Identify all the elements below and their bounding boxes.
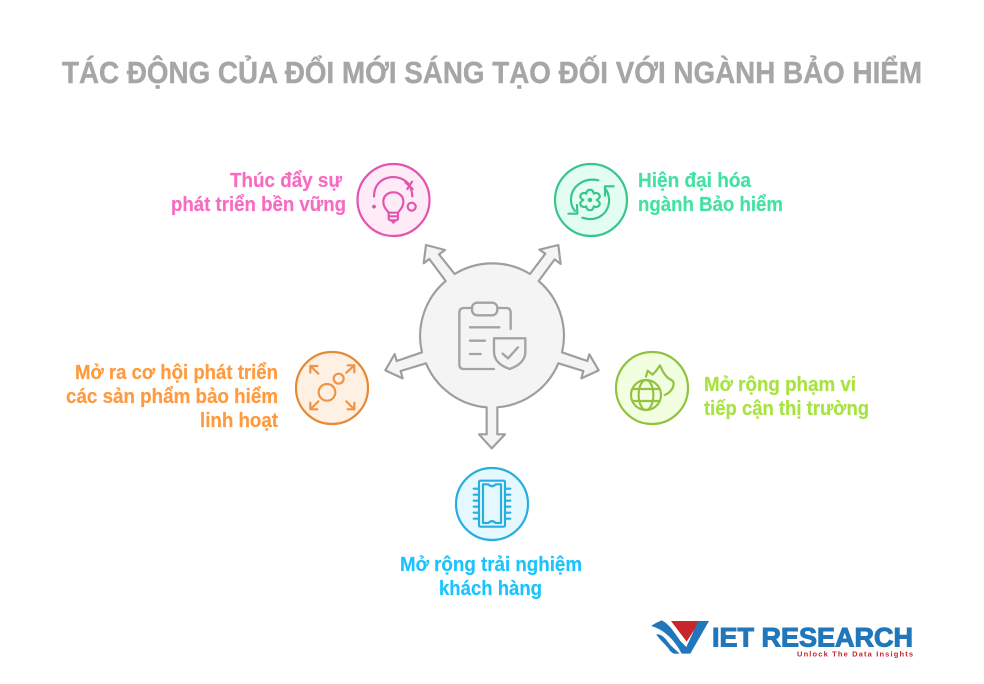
label xyxy=(704,374,869,420)
item: modernization (green) xyxy=(555,164,783,236)
label xyxy=(400,554,582,600)
label: Hiện đại hóa xyxy=(638,170,752,192)
node circle xyxy=(555,164,627,236)
label xyxy=(66,362,278,432)
label: Mở rộng trải nghiệm xyxy=(400,554,582,576)
label: Thúc đẩy sự xyxy=(230,170,342,192)
node circle xyxy=(616,352,688,424)
item: customer experience (blue) xyxy=(400,468,582,600)
title: TÁC ĐỘNG CỦA ĐỔI MỚI SÁNG TẠO ĐỐI VỚI NGÀNH BẢO HIỂM xyxy=(62,54,922,90)
node circle xyxy=(358,164,430,236)
label: linh hoạt xyxy=(200,410,278,432)
item: flexible products (orange) xyxy=(66,352,368,432)
node circle xyxy=(296,352,368,424)
icon: microchip xyxy=(474,481,510,527)
logo wordmark: IET RESEARCH xyxy=(712,622,913,652)
item: sustainable development (pink) xyxy=(171,164,430,236)
label: khách hàng xyxy=(439,578,542,600)
icon: clipboard with shield xyxy=(459,303,525,369)
label: ngành Bảo hiểm xyxy=(638,194,783,216)
icon: expanding circles xyxy=(310,365,354,409)
label xyxy=(638,170,783,216)
logo mark xyxy=(651,620,709,654)
label xyxy=(171,170,346,216)
label: phát triển bền vững xyxy=(171,194,346,216)
logo tagline: Unlock The Data Insights xyxy=(797,650,913,658)
logo: Viet Research xyxy=(651,620,913,658)
icon: rotating gear xyxy=(568,180,614,219)
label: tiếp cận thị trường xyxy=(704,398,869,420)
label: các sản phẩm bảo hiểm xyxy=(66,386,278,408)
icon: globe with flame xyxy=(631,365,674,410)
label: Mở rộng phạm vi xyxy=(704,374,856,396)
node circle xyxy=(456,468,528,540)
icon: light bulb xyxy=(373,177,416,223)
item: market reach (lime) xyxy=(616,352,869,424)
label: Mở ra cơ hội phát triển xyxy=(75,362,278,384)
central hub with five arrows xyxy=(385,245,599,448)
hub outline with arrows xyxy=(385,245,599,448)
